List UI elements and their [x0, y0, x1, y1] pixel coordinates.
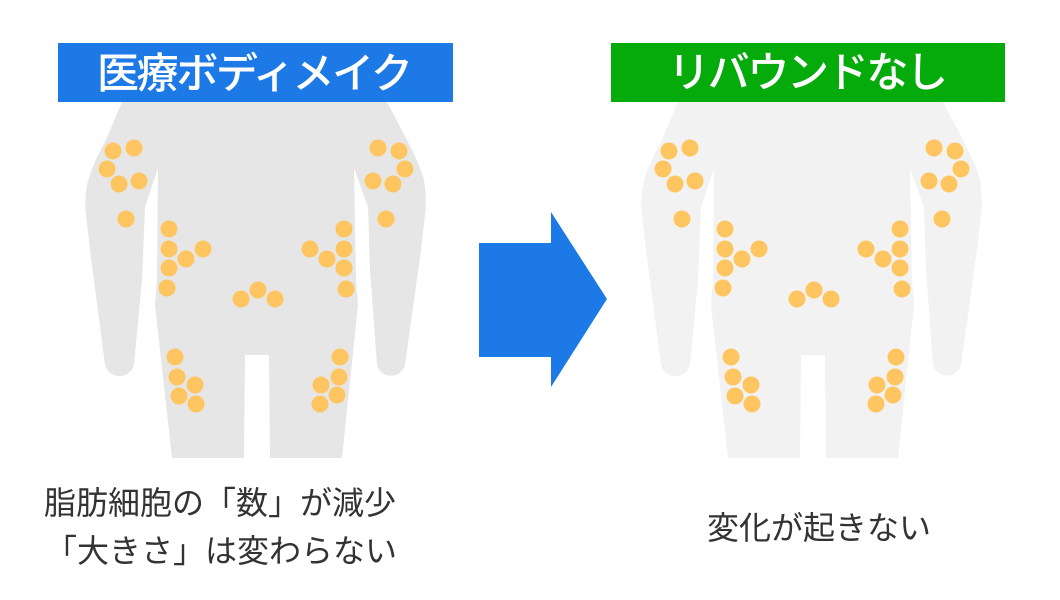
heading bar: after	[611, 43, 1005, 102]
heading bar: before	[58, 43, 453, 102]
panel: before, medical body make	[44, 43, 453, 569]
heading bar: after: リバウンドなし	[668, 49, 948, 96]
fat cells: before	[98, 140, 414, 412]
panel: after, no rebound	[611, 43, 1005, 546]
arrow	[479, 212, 607, 387]
body silhouette: after	[641, 102, 982, 458]
fat cells: after	[654, 140, 970, 412]
caption: before: 脂肪細胞の「数」が減少	[44, 485, 396, 521]
body silhouette: before	[85, 102, 426, 458]
caption: after: 変化が起きない	[707, 510, 931, 546]
caption: before	[44, 485, 397, 569]
caption: before: 「大きさ」は変わらない	[45, 533, 397, 569]
heading bar: before: 医療ボディメイク	[97, 50, 413, 97]
